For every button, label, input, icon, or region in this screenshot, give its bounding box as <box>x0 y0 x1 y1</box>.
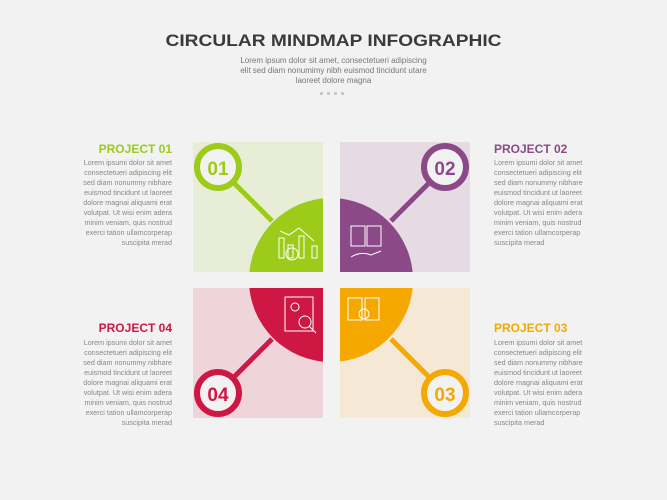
text: project 04 <box>83 321 172 427</box>
text: project 03: consectetueri adipiscing elit <box>494 348 582 357</box>
text: project 01: dolore magnai aliquami erat <box>83 198 172 207</box>
subtitle: Lorem ipsum dolor sit amet, consectetueri adipiscing <box>240 56 427 65</box>
text: project 01: minim veniam, quis nostrud <box>85 218 172 227</box>
text: project 03 <box>494 321 583 427</box>
text: project 03: minim veniam, quis nostrud <box>494 398 581 407</box>
text: project 02: Lorem ipsumi dolor sit amet <box>494 158 582 167</box>
subtitle: elit sed diam nonumimy nibh euismod tincidunt utare <box>240 66 427 75</box>
connector 03 <box>391 339 445 393</box>
text: project 04: dolore magnai aliquami erat <box>83 378 172 387</box>
text: project 03: euismod tincidunt ut laoreet <box>494 368 582 377</box>
badge 03: 03 <box>434 385 456 406</box>
icon: dashboard <box>348 298 379 320</box>
panel: project 01 <box>193 142 323 272</box>
text: project 03: exerci tation ullamcorperap <box>494 408 580 417</box>
text: project 04: Lorem ipsumi dolor sit amet <box>84 338 172 347</box>
subtitle <box>240 56 427 85</box>
text: project 01: suscipita merad <box>122 238 172 247</box>
text: project 04: PROJECT 04 <box>99 321 172 335</box>
text: project 02: consectetueri adipiscing elit <box>494 168 582 177</box>
icon: book <box>351 226 381 257</box>
icon: report <box>285 297 316 333</box>
text: project 04: exerci tation ullamcorperap <box>86 408 172 417</box>
badge 01 <box>197 146 239 188</box>
text: project 01: euismod tincidunt ut laoreet <box>84 188 172 197</box>
text: project 04: suscipita merad <box>122 418 172 427</box>
badge 04: 04 <box>207 385 229 406</box>
text: project 04: sed diam nonummy nibhare <box>83 358 172 367</box>
connector 04 <box>218 339 272 393</box>
subtitle: laoreet dolore magna <box>296 76 372 85</box>
text: project 02: euismod tincidunt ut laoreet <box>494 188 582 197</box>
text: project 02: sed diam nonummy nibhare <box>494 178 583 187</box>
text: project 04: minim veniam, quis nostrud <box>85 398 172 407</box>
text: project 01 <box>83 142 172 247</box>
badge 03 <box>424 372 466 414</box>
text: project 01: exerci tation ullamcorperap <box>86 228 172 237</box>
panel: project 04 <box>193 288 323 418</box>
dots <box>320 92 344 95</box>
text: project 02: minim veniam, quis nostrud <box>494 218 581 227</box>
text: project 03: dolore magnai aliquami erat <box>494 378 583 387</box>
badge 04 <box>197 372 239 414</box>
text: project 02: exerci tation ullamcorperap <box>494 228 580 237</box>
text: project 03: volutpat. Ut wisi enim adera <box>494 388 582 397</box>
text: project 01: volutpat. Ut wisi enim adera <box>84 208 172 217</box>
text: project 02: PROJECT 02 <box>494 142 568 156</box>
text: project 03: sed diam nonummy nibhare <box>494 358 583 367</box>
text: project 01: Lorem ipsumi dolor sit amet <box>84 158 172 167</box>
text: project 01: consectetueri adipiscing elit <box>84 168 172 177</box>
icon: chart <box>279 228 317 260</box>
text: project 04: volutpat. Ut wisi enim adera <box>84 388 172 397</box>
text: project 03: Lorem ipsumi dolor sit amet <box>494 338 582 347</box>
text: project 02: volutpat. Ut wisi enim adera <box>494 208 582 217</box>
text: project 03: suscipita merad <box>494 418 544 427</box>
connector 01 <box>218 167 272 221</box>
text: project 02: suscipita merad <box>494 238 544 247</box>
text: project 04: euismod tincidunt ut laoreet <box>84 368 172 377</box>
text: project 01: PROJECT 01 <box>99 142 172 156</box>
connector 02 <box>391 167 445 221</box>
badge 02: 02 <box>434 159 456 180</box>
panel: project 02 <box>340 142 470 272</box>
text: project 02 <box>494 142 583 247</box>
text: project 03: PROJECT 03 <box>494 321 568 335</box>
title: CIRCULAR MINDMAP INFOGRAPHIC <box>166 31 502 50</box>
text: project 01: sed diam nonummy nibhare <box>83 178 172 187</box>
text: project 04: consectetueri adipiscing elit <box>84 348 172 357</box>
text: project 02: dolore magnai aliquami erat <box>494 198 583 207</box>
panel: project 03 <box>340 288 470 418</box>
badge 01: 01 <box>207 159 229 180</box>
badge 02 <box>424 146 466 188</box>
